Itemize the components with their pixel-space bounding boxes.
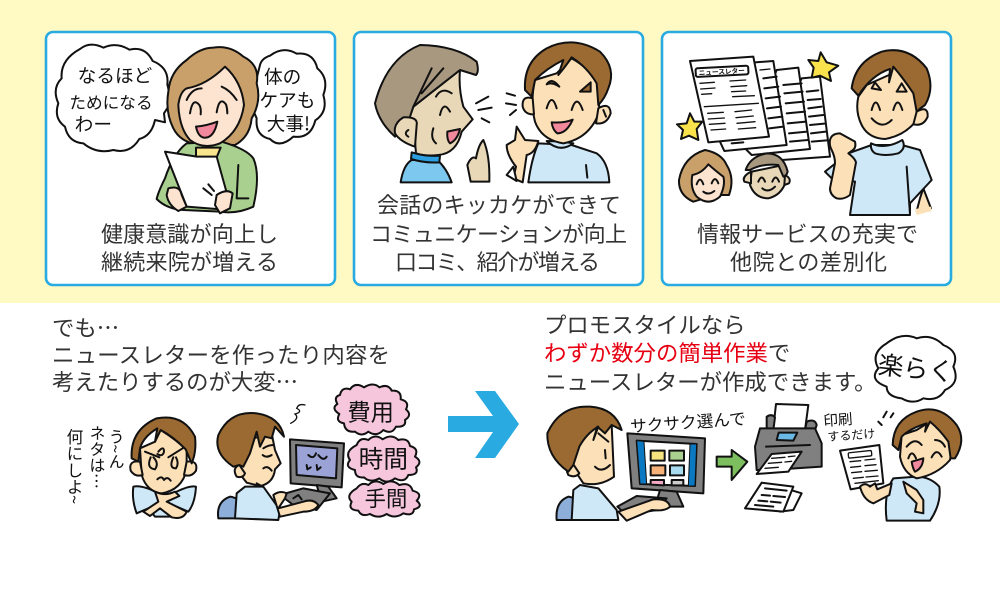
cloud: easy — [875, 336, 956, 402]
panel: health awareness — [46, 32, 335, 285]
caption: 会話のキッカケができて — [377, 188, 621, 220]
cloud: easy: 楽らく — [876, 346, 956, 389]
staff with printed newsletter — [840, 409, 961, 521]
effort cloud — [349, 481, 420, 517]
handwritten thought, vertical: う~ん — [105, 428, 129, 469]
illustration: woman reading with speech bubbles — [56, 45, 325, 213]
caption — [370, 188, 627, 277]
newsletters: ニュースレター — [698, 65, 745, 77]
handwritten: just print — [823, 408, 876, 445]
patient: man — [744, 153, 790, 198]
speech bubble: right: 体の — [264, 63, 301, 90]
patient: woman — [679, 150, 732, 202]
illustration: newsletters, stars, patients and staff — [677, 50, 932, 215]
text block: problem: ニュースレターを作ったり内容を — [52, 338, 390, 370]
staff with fist — [825, 50, 932, 215]
speech bubble: left — [56, 45, 169, 151]
caption: 継続来院が増える — [101, 245, 278, 277]
man with crossed arms — [130, 417, 196, 518]
effort cloud: 手間 — [365, 483, 407, 514]
speech bubble: right — [252, 50, 325, 143]
speech bubble: left: わー — [75, 110, 112, 137]
time cloud — [348, 436, 419, 482]
newsletters — [690, 57, 830, 160]
speech bubble: right: 大事! — [267, 109, 310, 136]
man at computer — [217, 405, 344, 520]
text block: solution — [544, 308, 876, 397]
speech bubble: right: ケアも — [259, 86, 315, 113]
text block: problem: でも… — [52, 311, 119, 343]
handwritten thought, vertical — [63, 425, 129, 504]
caption — [697, 217, 918, 277]
speech bubble: left: なるほど — [78, 61, 153, 88]
staff at computer — [547, 407, 705, 521]
handwritten: just print: 印刷 — [823, 408, 853, 431]
caption: 他院との差別化 — [730, 245, 887, 277]
text block: solution: ニュースレターが作成できます。 — [544, 365, 876, 397]
illustration: two people talking — [375, 42, 611, 182]
older patient — [375, 45, 492, 182]
panel: information service — [662, 32, 951, 285]
illustration: easy newsletter creation — [547, 336, 961, 521]
text block: solution: わずか数分の簡単作業で — [544, 336, 790, 368]
caption — [101, 217, 278, 277]
arrow: green — [717, 450, 747, 480]
handwritten: sakusaku: サクサク選んで — [629, 405, 746, 437]
cost cloud: 費用 — [347, 394, 394, 428]
caption: 健康意識が向上し — [101, 217, 278, 249]
arrow: problem to solution — [448, 391, 519, 458]
star: top — [808, 52, 838, 81]
yellow top band — [0, 0, 1000, 303]
star: left — [677, 113, 702, 140]
caption: 口コミ、紹介が増える — [395, 245, 600, 277]
printer — [745, 404, 822, 512]
illustration: staff worrying — [63, 384, 420, 520]
handwritten thought, vertical: 何にしよ~ — [63, 428, 87, 504]
time cloud: 時間 — [359, 439, 408, 475]
woman — [157, 47, 258, 213]
text block: problem: 考えたりするのが大変… — [52, 365, 298, 397]
text block: solution: プロモスタイルなら — [544, 308, 746, 340]
speech bubble: left: ためになる — [69, 89, 153, 113]
cost cloud — [334, 384, 409, 434]
caption: コミュニケーションが向上 — [370, 217, 627, 249]
handwritten: just print: するだけ — [827, 425, 876, 445]
clinic staff — [506, 42, 611, 182]
handwritten thought, vertical: ネタは… — [85, 425, 109, 489]
panel: communication — [354, 32, 643, 285]
caption: 情報サービスの充実で — [697, 217, 918, 249]
text block: problem — [52, 311, 390, 397]
